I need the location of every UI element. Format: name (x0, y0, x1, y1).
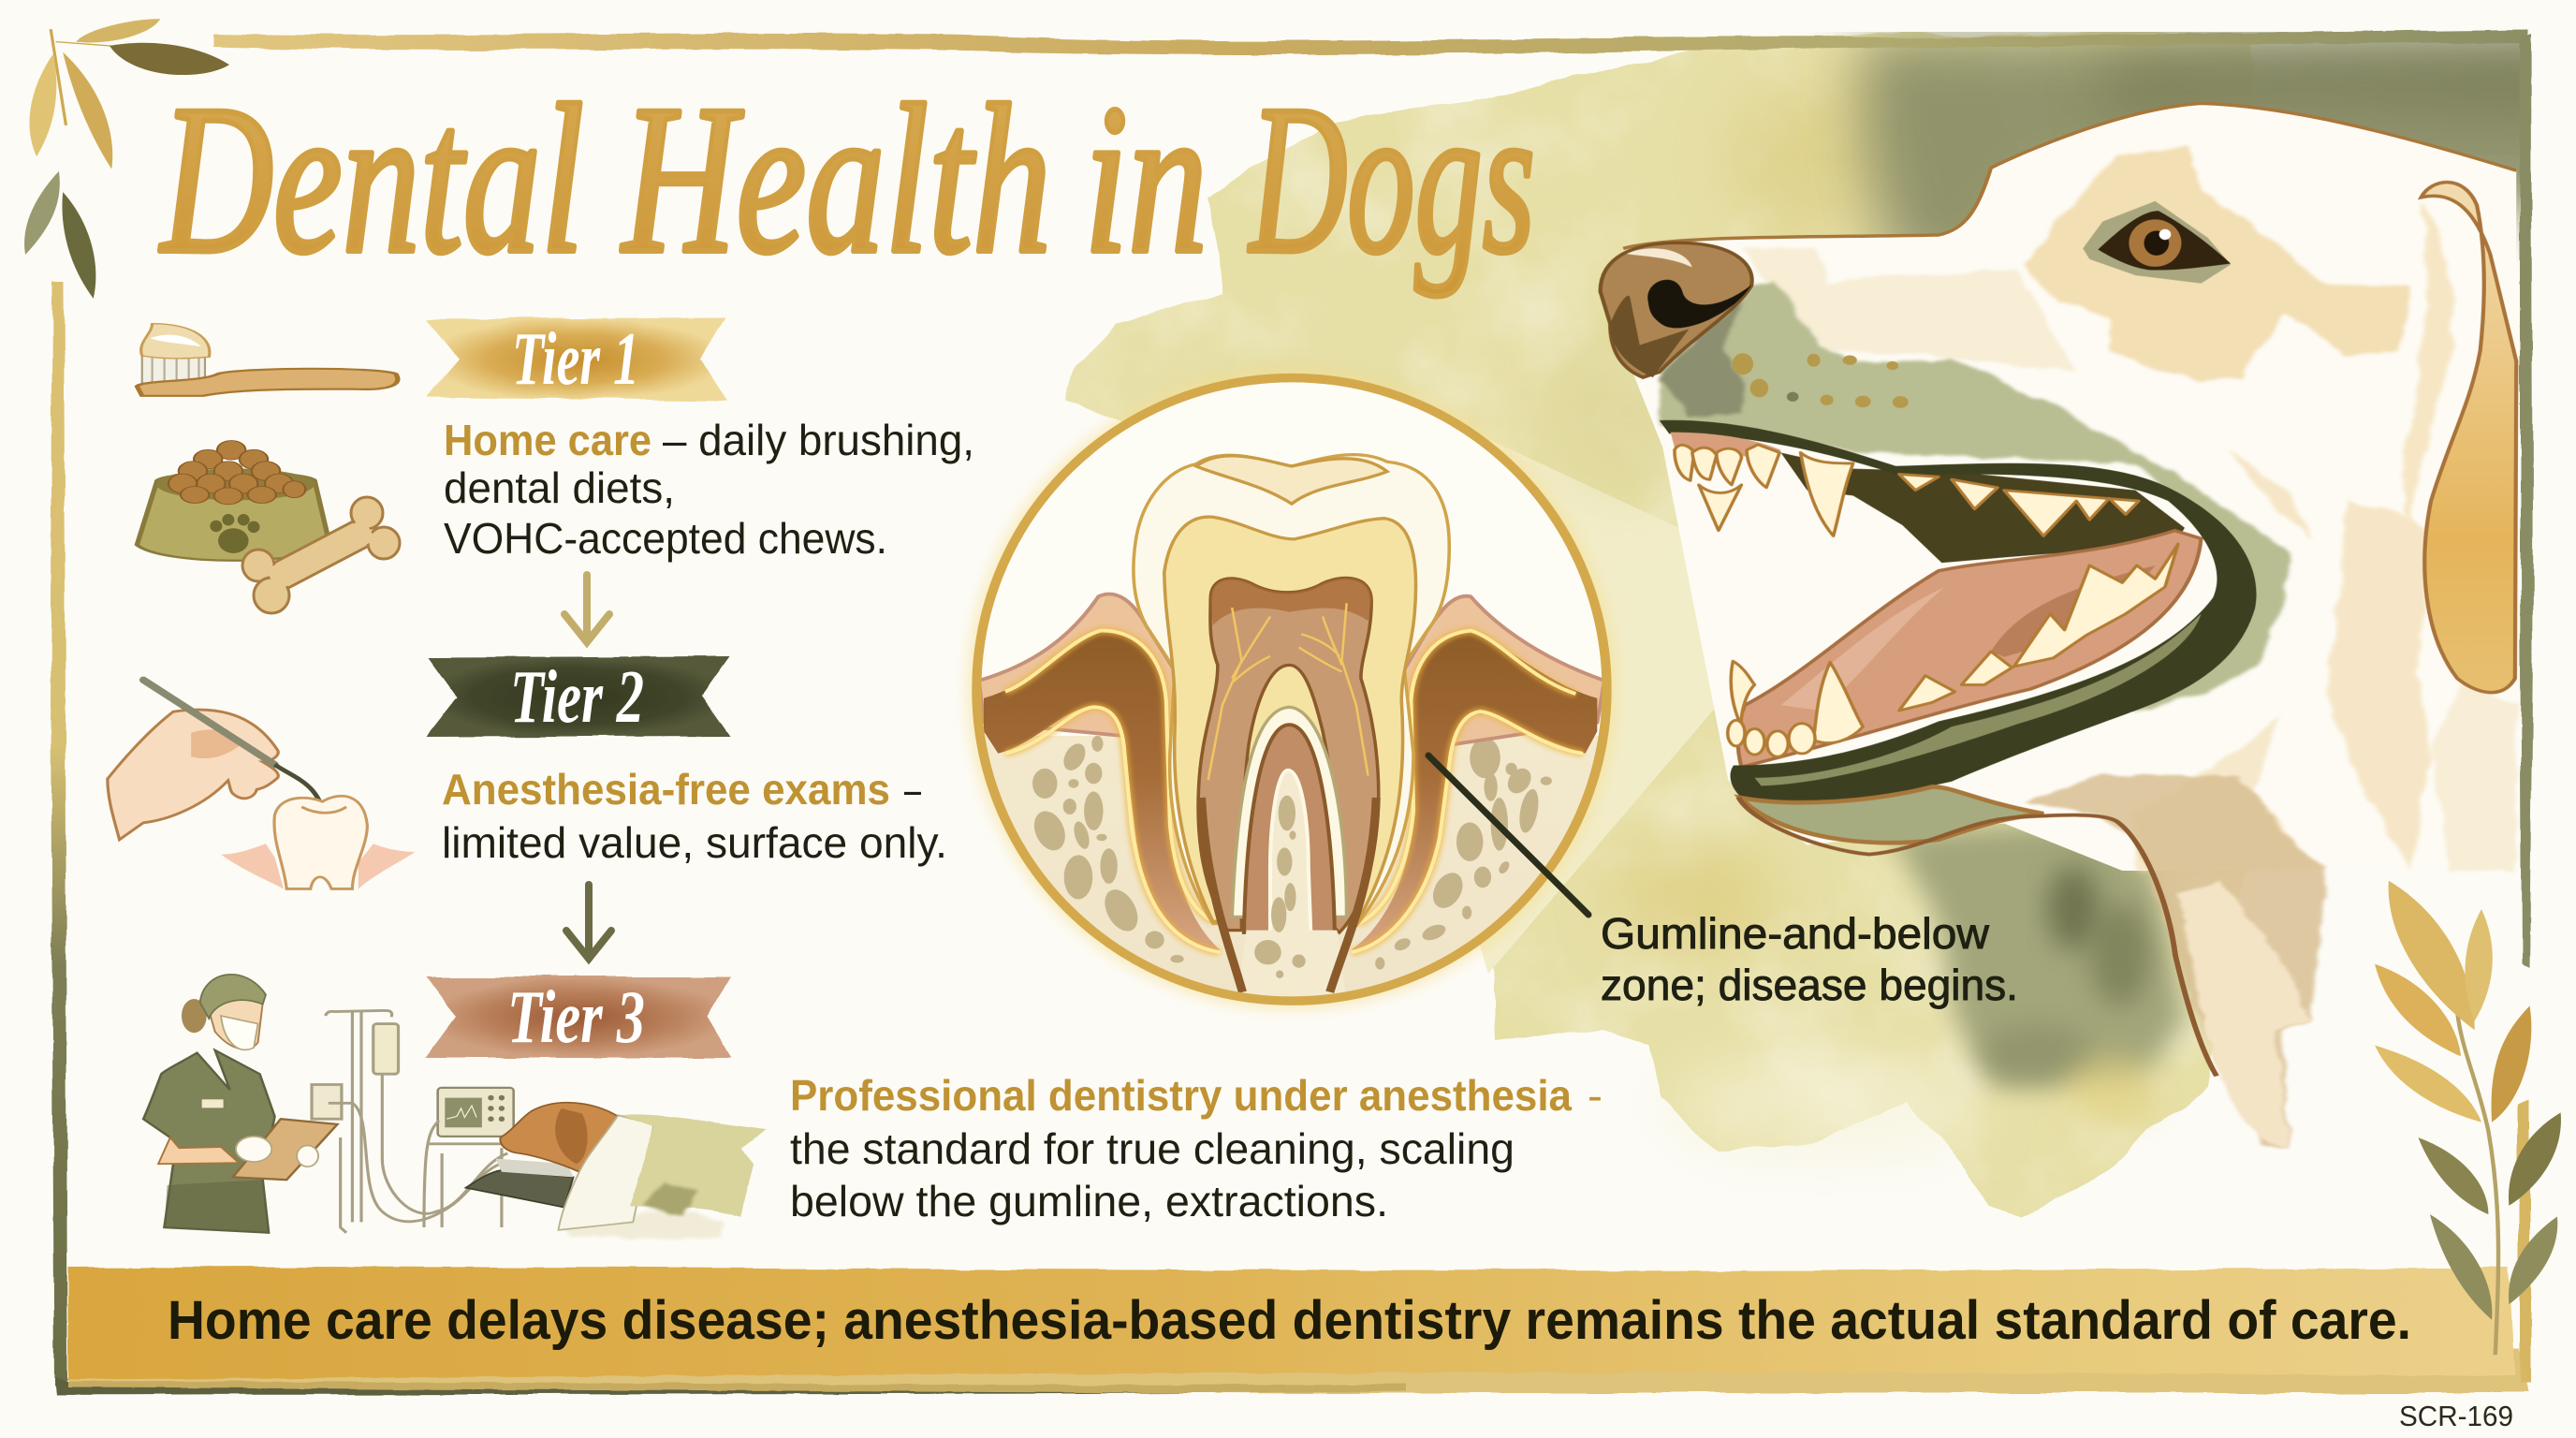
icon: toothbrush (137, 324, 398, 396)
tier 3 text (790, 1071, 1603, 1225)
nurse (143, 975, 337, 1233)
title: in (1084, 62, 1208, 298)
ear (2422, 183, 2516, 693)
dentin (1164, 517, 1416, 924)
mouth interior (1781, 452, 2185, 563)
source code: SCR-169 (2399, 1400, 2513, 1432)
dog neck and chest (1738, 775, 2327, 1149)
tier 3 text: Professional dentistry under anesthesia (790, 1071, 1572, 1120)
head outline (1623, 103, 2516, 248)
tier 3 text: below the gumline, extractions. (790, 1177, 1388, 1225)
lower teeth (1728, 544, 2178, 756)
upper gum (1671, 433, 1781, 458)
tier 1 text (444, 416, 974, 563)
root canals (1202, 798, 1242, 992)
dog head illustration (1601, 103, 2516, 871)
icon: hand with dental probe on tooth (108, 680, 415, 888)
tier 3 text: - (1588, 1071, 1603, 1120)
summary text: Home care delays disease; anesthesia-based dentistry remains the actual standard of care. (168, 1290, 2411, 1351)
inner arch (1232, 707, 1347, 917)
icon: food bowl (137, 441, 329, 561)
arrow: tier 2 to tier 3 (566, 885, 611, 959)
circle glow (967, 369, 1617, 1010)
gums (981, 592, 1172, 738)
arrow: tier 1 to tier 2 (564, 575, 609, 642)
callout leader line (1428, 756, 1588, 915)
tier 2 text: Anesthesia-free exams (442, 765, 890, 814)
tier 1 text: dental diets, (444, 463, 675, 512)
nerves (1208, 603, 1368, 780)
tier 3 text: the standard for true cleaning, scaling (790, 1124, 1515, 1173)
circle interior (976, 378, 1607, 1001)
tier 2 text: – (904, 765, 921, 814)
tier 2 banner: Tier 2 (510, 656, 644, 739)
dark upper lip band (1660, 420, 2257, 801)
tier 1 banner (426, 317, 726, 401)
inflamed band right (1352, 632, 1597, 950)
anatomy (974, 455, 1604, 1019)
title: Dogs (1248, 62, 1535, 298)
bone pores (1029, 736, 1552, 970)
tier 1 banner: Tier 1 (512, 318, 639, 401)
tier 2 text (442, 765, 947, 867)
title (159, 62, 1535, 298)
IV pole and tubes (312, 1010, 507, 1233)
nose (1601, 242, 1752, 377)
dog head base (1601, 103, 2516, 871)
jaw bone (985, 736, 1599, 992)
icon: dog bone (242, 497, 400, 613)
tier 1 text: Home care (444, 416, 651, 464)
callout text: zone; disease begins. (1601, 961, 2018, 1009)
central bone (1270, 770, 1313, 1001)
watercolor wash behind dog (1065, 28, 2576, 1221)
tooth cross-section circle (967, 369, 1617, 1019)
tier 1 text: VOHC-accepted chews. (444, 514, 887, 563)
callout text: Gumline-and-below (1601, 909, 1990, 958)
inflamed band left (984, 632, 1220, 950)
icon: nurse with anesthetized dog (143, 975, 768, 1238)
enamel crown (1134, 455, 1449, 926)
neck fur (2027, 775, 2327, 1149)
upper teeth (1675, 445, 2139, 536)
bottom banner (68, 1267, 2527, 1393)
eye (2083, 201, 2231, 284)
tier 2 banner (426, 656, 730, 739)
circle ring (976, 378, 1607, 1001)
tongue and lower gum (1738, 531, 2202, 767)
eye patch and face markings (1741, 146, 2516, 871)
gumline glow (1005, 631, 1583, 952)
neck outline (1738, 798, 2217, 1076)
title: Dental (159, 62, 584, 298)
leaves: top-left sprig (24, 19, 229, 299)
whisker spots (1733, 353, 1909, 408)
dog patient (466, 1103, 768, 1238)
tier 1 text: – daily brushing, (663, 416, 974, 464)
tier 3 banner: Tier 3 (507, 976, 645, 1059)
callout text (1601, 909, 2018, 1009)
tier 2 text: limited value, surface only. (442, 818, 947, 867)
muzzle olive (1660, 281, 2290, 711)
pulp (1198, 578, 1379, 932)
gumline lines (1005, 631, 1583, 952)
chin (1740, 786, 2043, 843)
title: Health (621, 62, 1051, 298)
monitor (424, 1088, 514, 1227)
leaves: bottom-right sprig (2375, 881, 2561, 1355)
tier 3 banner (425, 976, 731, 1059)
